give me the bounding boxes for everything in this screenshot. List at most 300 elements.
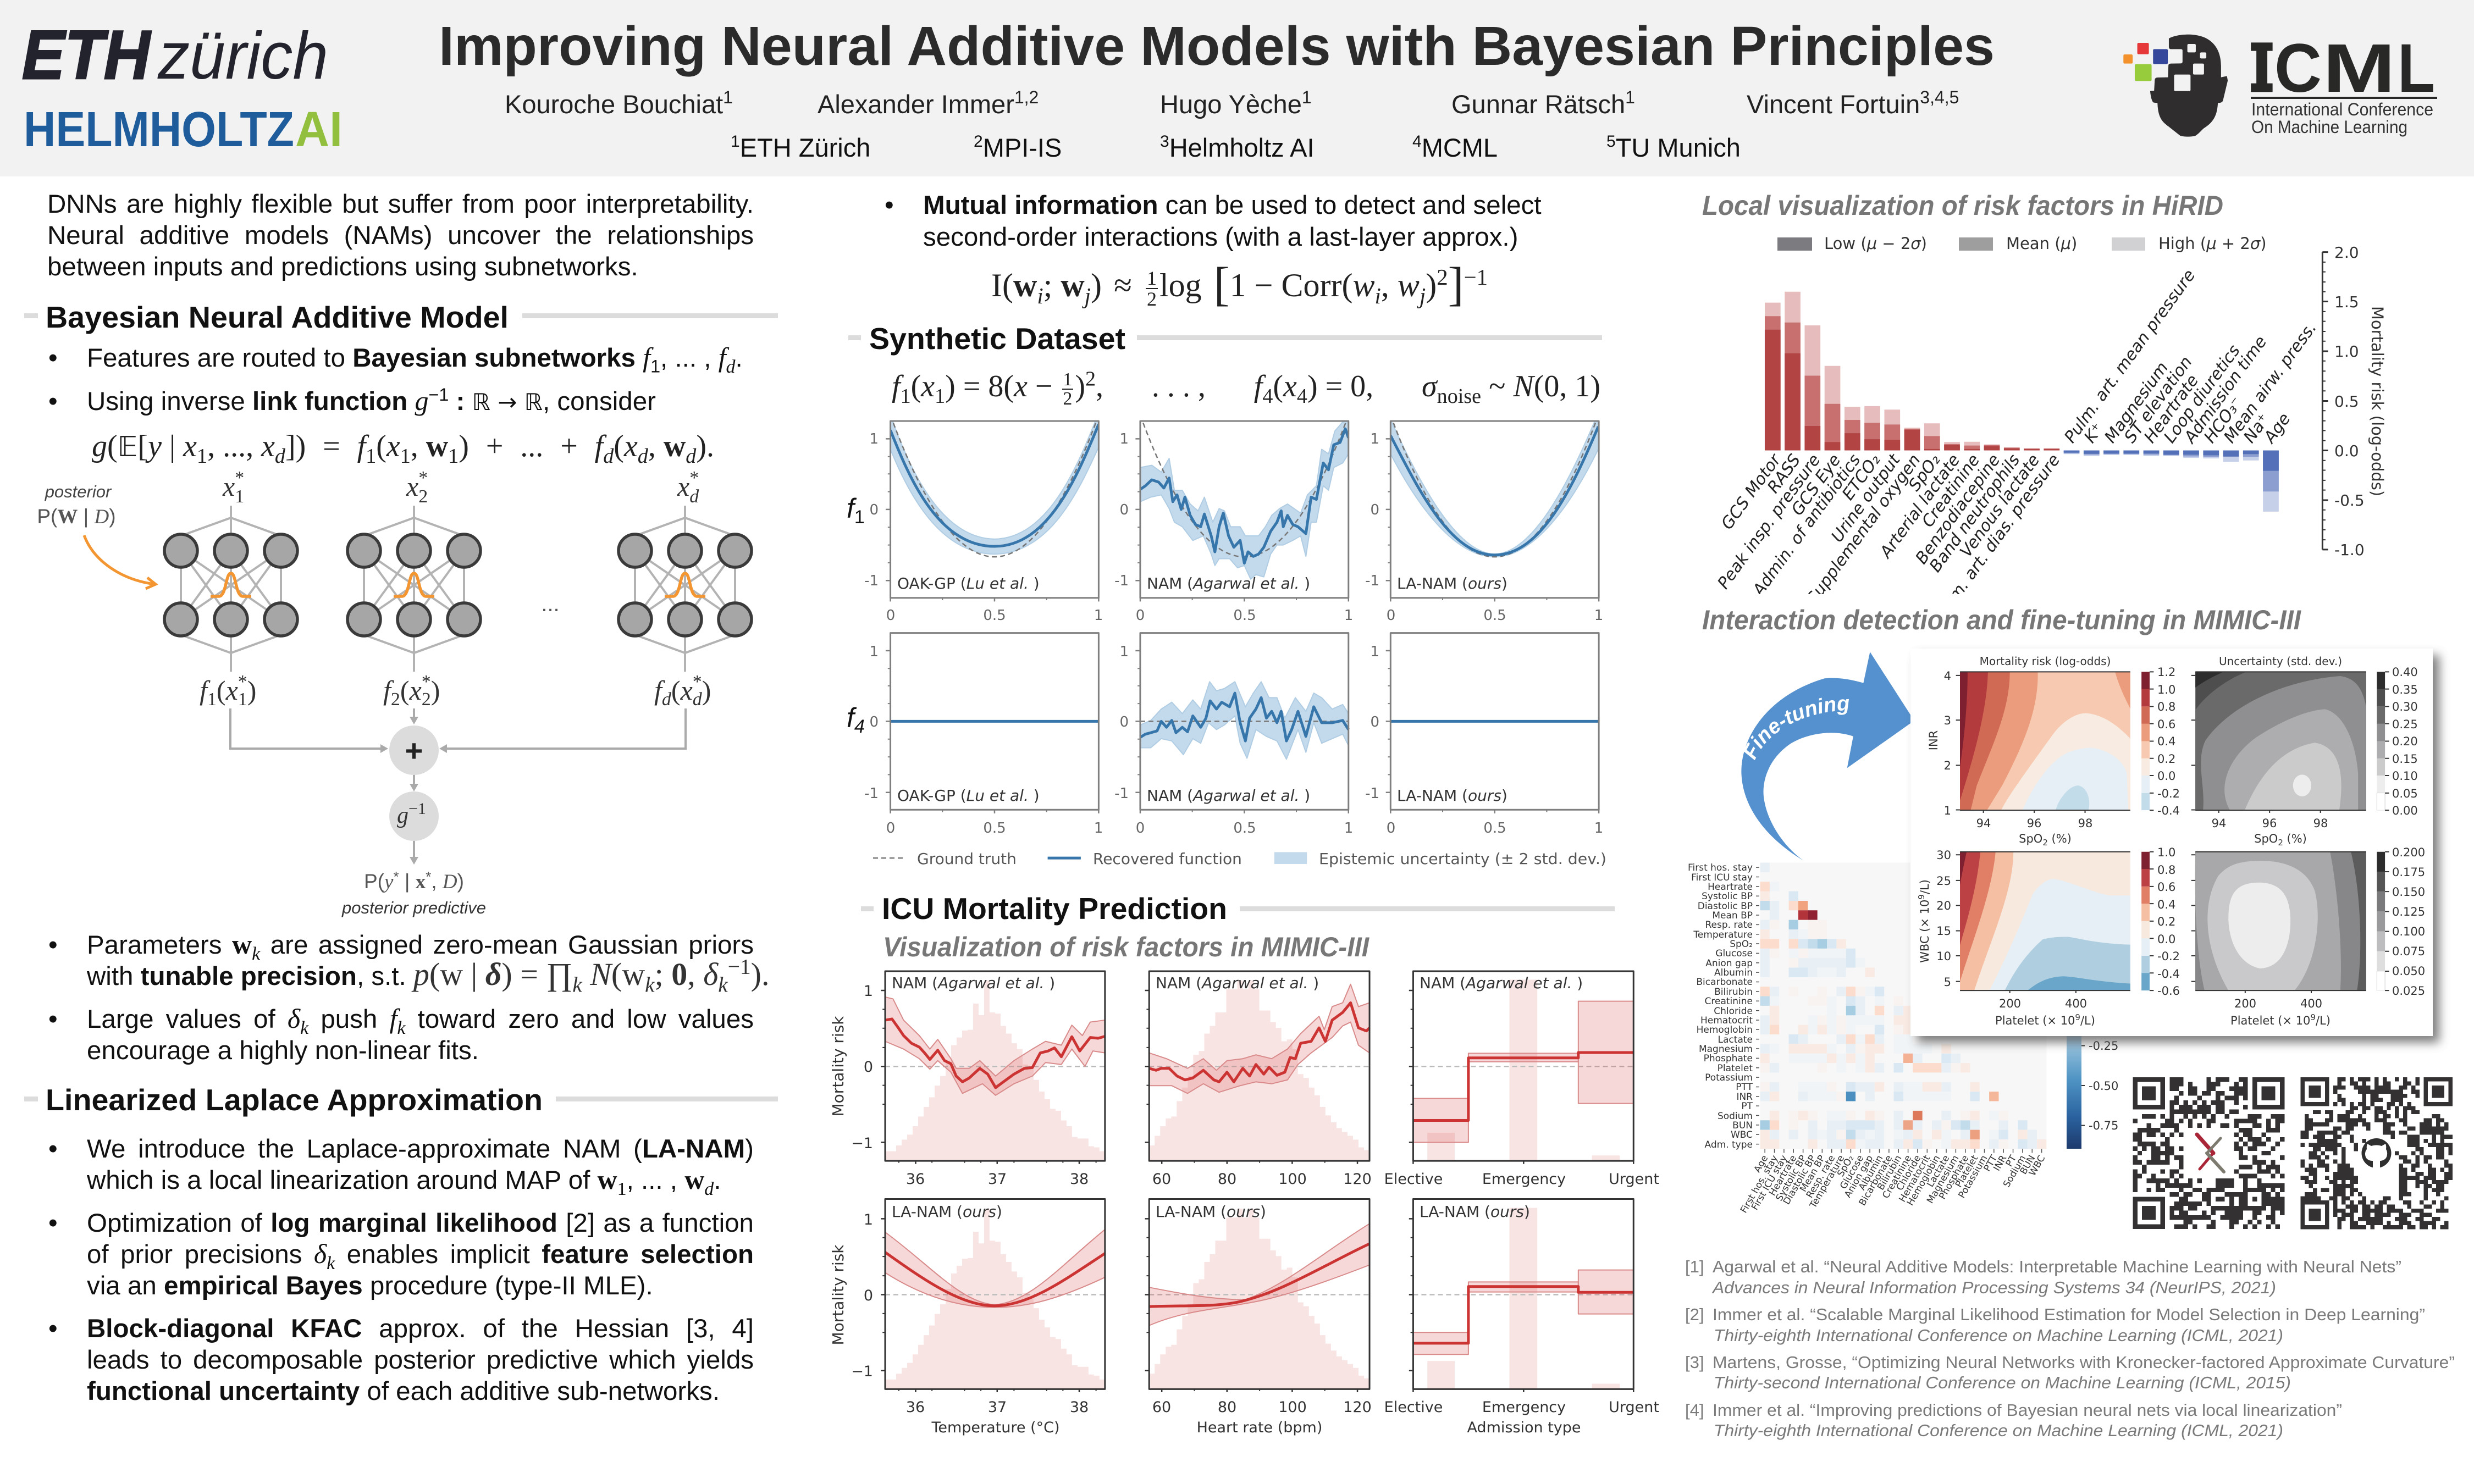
- bullet: marginal likelihood: of prior precisions δk enables implicit feature selection: [87, 1238, 754, 1273]
- histograms: [885, 979, 1620, 1389]
- legend: High (μ + 2σ): [2158, 234, 2267, 253]
- negative feature labels: GCS Eye: [1788, 451, 1845, 519]
- heatmap row labels: Lactate: [1718, 1034, 1753, 1045]
- ICU panel names: NAM (Agarwal et al. ): [892, 974, 1055, 992]
- negative feature labels: ETCO₂: [1838, 451, 1884, 504]
- label: posterior predictive: |: [399, 870, 416, 893]
- equation: additive model: = + ... +: [323, 429, 578, 463]
- heatmap column labels: PTT: [1982, 1153, 2000, 1173]
- affiliations: 2: [974, 132, 983, 151]
- ICU x labels: 37: [988, 1399, 1007, 1416]
- ICU x labels: Elective: [1384, 1399, 1443, 1416]
- heatmap column labels: Platelet: [1953, 1153, 1980, 1189]
- label: posterior: posterior: [45, 482, 112, 501]
- contour tick labels: 1: [1944, 804, 1951, 817]
- authors: Hugo Yèche: [1160, 90, 1302, 119]
- heatmap column labels: PT: [2004, 1153, 2019, 1169]
- bullet: priors: with tunable precision, s.t. p(w | δ) = ∏k N(wk; 0, δk−1).: [87, 955, 769, 997]
- chart: HiRID risk factors: [1714, 234, 2387, 625]
- contour tick labels: 25: [1936, 874, 1951, 888]
- equation: mutual information: 2: [1147, 288, 1157, 310]
- contour axis titles: (%): [2048, 832, 2072, 845]
- ICML logo: On Machine Learning: [2251, 117, 2407, 137]
- contour axis titles: /L): [1918, 879, 1931, 894]
- contour tick labels: 0.2: [2157, 752, 2175, 766]
- contour tick labels: 96: [2027, 817, 2041, 830]
- bullet: LA-NAM: which is a local linearization around MAP of w1, ... , wd.: [87, 1164, 721, 1199]
- equation: mutual information: 1: [1147, 267, 1157, 289]
- contour tick labels: 200: [2234, 997, 2256, 1010]
- contour tick labels: 1.0: [2157, 683, 2175, 696]
- bullet: large values: [48, 1003, 754, 1065]
- panel: fine-tuning contour card: [1910, 649, 2439, 1043]
- heatmap colorbar: -0.50: [2089, 1079, 2118, 1093]
- heatmap row labels: First hos. stay: [1688, 862, 1753, 873]
- synthetic tick labels: [864, 431, 1603, 837]
- contour tick labels: 20: [1936, 899, 1951, 912]
- output labels: 1: [238, 689, 247, 710]
- negative feature labels: Venous lactate: [1956, 451, 2044, 561]
- reference 4: Thirty-eighth International Conference on Machine Learning (ICML, 2021): [1714, 1421, 2283, 1440]
- equation: additive model: g(𝔼[y | x1, ..., xd]): [92, 429, 306, 468]
- affiliations: 5: [1606, 132, 1616, 151]
- contour tick labels: 0.00: [2392, 804, 2418, 817]
- bullet: mutual information: second-order interactions (with a last-layer approx.): [923, 223, 1518, 252]
- heatmap column labels: Hematocrit: [1897, 1153, 1932, 1204]
- synthetic tick labels: 1: [1094, 607, 1103, 624]
- ICU panel names: LA-NAM (ours): [1420, 1203, 1530, 1221]
- synthetic tick labels: 1: [869, 431, 879, 447]
- negative feature labels: GCS Motor: [1718, 450, 1785, 533]
- ICU x labels: Heart rate (bpm): [1197, 1419, 1322, 1436]
- contour tick labels: 1.2: [2157, 666, 2175, 679]
- heatmap row labels: Sodium: [1718, 1111, 1753, 1122]
- row label f4: 4: [854, 716, 865, 737]
- equation: synthetic functions: σnoise ~ N(0, 1): [1422, 369, 1600, 408]
- authors: [505, 87, 1959, 119]
- contour tick labels: 0.6: [2157, 881, 2175, 894]
- ICU x labels: Temperature (°C): [931, 1419, 1060, 1436]
- heatmap row labels: Mean BP: [1712, 910, 1753, 921]
- ICU x labels: 38: [1070, 1171, 1089, 1188]
- output labels: ): [431, 675, 440, 706]
- axis tick labels: -1.0: [2334, 541, 2365, 559]
- axis tick labels: 1.0: [2334, 342, 2359, 361]
- heatmap row labels: Heartrate: [1708, 882, 1753, 893]
- contour axis titles: 9: [2075, 1012, 2080, 1022]
- ETH Zurich logo: zürich: [157, 18, 328, 93]
- positive feature labels: K⁺: [2080, 419, 2107, 447]
- contour tick labels: 4: [1944, 669, 1951, 683]
- heatmap row labels: Chloride: [1714, 1006, 1753, 1017]
- contour tick labels: 1.0: [2157, 846, 2175, 859]
- heatmap row labels: Hemoglobin: [1697, 1025, 1753, 1036]
- axis tick labels: [2334, 243, 2365, 559]
- panel: f4 OAK-GP: [891, 720, 1098, 723]
- contour tick labels: 0.8: [2157, 700, 2175, 713]
- output labels: [200, 672, 711, 710]
- text: •: [48, 1314, 58, 1343]
- ICU y axis titles: Mortality risk: [829, 1016, 847, 1117]
- row label f4: f: [847, 702, 854, 733]
- heatmap row labels: Albumin: [1714, 967, 1753, 978]
- output labels: 2: [391, 689, 400, 710]
- text: •: [48, 1209, 58, 1238]
- synthetic tick labels: -1: [864, 573, 879, 589]
- heatmap column labels: Glucose: [1838, 1153, 1866, 1191]
- label: posterior: P(W | D): [37, 505, 116, 528]
- synthetic tick labels: 0.5: [1483, 820, 1506, 837]
- authors: 1,2: [1014, 87, 1039, 107]
- ICU x labels: 60: [1152, 1399, 1171, 1416]
- arrow: posterior to weights: [84, 535, 156, 589]
- reference 2: [2]: [1685, 1305, 1704, 1324]
- ICU panel names: LA-NAM (ours): [1156, 1203, 1266, 1221]
- text: •: [885, 191, 894, 220]
- contour tick labels: 0.200: [2392, 846, 2425, 859]
- ICU x labels: 37: [988, 1171, 1007, 1188]
- node: inverse link: −1: [408, 800, 426, 818]
- ICU y axis titles: [829, 1016, 847, 1345]
- output labels: 1: [207, 689, 217, 710]
- contour tick labels: 400: [2300, 997, 2322, 1010]
- ellipsis: ...: [541, 592, 560, 616]
- equation: mutual information: [991, 268, 1488, 301]
- authors: Gunnar Rätsch: [1451, 90, 1625, 119]
- synthetic tick labels: 0: [886, 607, 895, 624]
- synthetic tick labels: 0: [886, 820, 895, 837]
- affiliations: MPI-IS: [983, 133, 1062, 162]
- label: posterior predictive: D): [443, 870, 464, 893]
- affiliations: 4: [1412, 132, 1422, 151]
- bullet: marginal likelihood: via an empirical Bayes procedure (type-II MLE).: [87, 1271, 653, 1300]
- title: Improving Neural Additive Models with Bayesian Principles: [439, 15, 1995, 77]
- heatmap row labels: Creatinine: [1705, 996, 1753, 1007]
- input labels: 1: [235, 486, 244, 507]
- heatmap row labels: [1688, 862, 1753, 1150]
- equation: synthetic functions: 1: [1063, 369, 1072, 390]
- ETH Zurich logo: [22, 17, 328, 93]
- heading: Bayesian Neural Additive Model: [24, 300, 778, 334]
- bullet: marginal likelihood: Optimization of log marginal likelihood [2] as a function: [87, 1209, 754, 1238]
- contour axis titles: WBC (× 10: [1918, 900, 1931, 963]
- reference 2: [1685, 1305, 2425, 1345]
- ICU panel names: LA-NAM (ours): [892, 1203, 1002, 1221]
- synthetic panel names: LA-NAM (ours): [1397, 787, 1507, 805]
- affiliations: [731, 132, 1741, 162]
- negative feature labels: Arterial lactate: [1876, 451, 1964, 562]
- equation: mutual information: [1 − Corr(wi, wj)2]−1: [1214, 257, 1488, 311]
- bullet: KFAC: [48, 1314, 754, 1406]
- synthetic tick labels: -1: [1114, 785, 1129, 802]
- input labels: x: [406, 471, 418, 502]
- input labels: [222, 468, 699, 507]
- ETH Zurich logo: ETH: [22, 17, 152, 93]
- heatmap column labels: Age: [1752, 1153, 1770, 1175]
- synthetic tick labels: 1: [1370, 644, 1379, 660]
- heatmap row labels: Diastolic BP: [1698, 901, 1753, 912]
- positive feature labels: Loop diuretics: [2160, 341, 2244, 447]
- chart: interaction heatmap: [1688, 862, 2118, 1215]
- network 3: [618, 506, 752, 672]
- contour tick labels: 3: [1944, 714, 1951, 727]
- input labels: x: [677, 471, 689, 502]
- synthetic tick labels: 0: [1387, 607, 1395, 624]
- affiliations: MCML: [1422, 133, 1498, 162]
- heatmap column labels: SpO₂: [1835, 1153, 1856, 1179]
- Helmholtz AI logo: AI: [295, 102, 343, 157]
- synthetic panel names: [897, 574, 1507, 805]
- output labels: f: [654, 675, 665, 706]
- heatmap column labels: Phosphate: [1937, 1153, 1971, 1201]
- axis tick labels: 2.0: [2334, 243, 2359, 262]
- bullet: priors: Parameters wk are assigned zero-mean Gaussian priors: [87, 929, 754, 964]
- references: [1685, 1257, 2455, 1440]
- reference 2: Thirty-eighth International Conference on Machine Learning (ICML, 2021): [1714, 1326, 2283, 1345]
- contour tick labels: 96: [2262, 817, 2277, 830]
- legend text: [917, 850, 1606, 868]
- chart: ICU mortality grid: [829, 971, 1659, 1436]
- axis tick labels: 1.5: [2334, 293, 2359, 311]
- ICU y labels: 0: [864, 1059, 873, 1076]
- contour tick labels: [1936, 666, 2425, 1010]
- text: introduction: [47, 190, 754, 281]
- synthetic tick labels: 1: [1119, 431, 1129, 447]
- synthetic tick labels: 0: [1387, 820, 1395, 837]
- equation: mutual information: I(wi; wj): [991, 267, 1102, 308]
- label: posterior predictive: P(y: [364, 870, 393, 893]
- legend: Low (μ − 2σ): [1824, 234, 1927, 253]
- contour tick labels: 0.2: [2157, 915, 2175, 928]
- output labels: *: [422, 672, 431, 692]
- ICU x labels: Emergency: [1482, 1399, 1566, 1416]
- diagram: Bayesian additive network: [37, 468, 752, 917]
- node: inverse link: [389, 791, 439, 841]
- output labels: (: [217, 675, 226, 706]
- subheading: HiRID risk factors: Local visualization of risk factors in HiRID: [1702, 190, 2223, 221]
- equation: additive model: fd(xd, wd).: [595, 429, 714, 468]
- affiliations: 1: [731, 132, 740, 151]
- text: •: [48, 1005, 58, 1034]
- risk means: [885, 1003, 1633, 1343]
- row label f1: 1: [854, 507, 865, 528]
- negative feature labels: Pulm. art. dias. pressure: [1930, 451, 2064, 625]
- authors: Kouroche Bouchiat: [505, 90, 723, 119]
- heatmap column labels: WBC: [2027, 1153, 2047, 1178]
- synthetic panel names: LA-NAM (ours): [1397, 574, 1507, 593]
- bullet: KFAC: leads to decomposable posterior predictive which yields: [87, 1345, 754, 1375]
- negative feature labels: Urine output: [1827, 450, 1904, 546]
- ICU panel names: NAM (Agarwal et al. ): [1156, 974, 1319, 992]
- reference 3: [1685, 1353, 2455, 1392]
- panel: f1 LA-NAM: [1390, 413, 1598, 557]
- row label f1: f: [847, 493, 854, 524]
- synthetic tick labels: 0.5: [983, 820, 1006, 837]
- contour tick labels: -0.2: [2157, 950, 2180, 963]
- legend: Mean (μ): [2006, 234, 2077, 253]
- heatmap column labels: Creatinine: [1880, 1153, 1914, 1200]
- ICU y labels: −1: [851, 1135, 873, 1152]
- bullet: KFAC: functional uncertainty of each additive sub-networks.: [87, 1377, 720, 1406]
- contour axis titles: SpO: [2019, 832, 2042, 845]
- heatmap row labels: WBC: [1731, 1129, 1753, 1140]
- bullet: large values: Large values of δk push fk toward zero and low values: [87, 1003, 754, 1038]
- bullet: LA-NAM: We introduce the Laplace-approximate NAM (LA-NAM): [87, 1134, 754, 1164]
- synthetic tick labels: -1: [1114, 573, 1129, 589]
- positive feature labels: [2061, 266, 2321, 447]
- input labels: *: [689, 468, 699, 488]
- bullet: priors: [48, 929, 769, 997]
- contour tick labels: 0.125: [2392, 905, 2425, 918]
- heatmap row labels: Hematocrit: [1700, 1015, 1753, 1026]
- synthetic tick labels: 0: [1119, 502, 1129, 518]
- output labels: (: [671, 675, 681, 706]
- node: sum: +: [405, 733, 423, 768]
- authors: Vincent Fortuin: [1747, 90, 1920, 119]
- positive feature labels: Heartrate: [2140, 371, 2202, 447]
- synthetic tick labels: 1: [1344, 607, 1353, 624]
- negative feature labels: Supplemental oxygen: [1803, 451, 1924, 608]
- synthetic tick labels: 0.5: [983, 607, 1006, 624]
- zero lines: [885, 1066, 1633, 1295]
- heatmap column labels: Lactate: [1925, 1153, 1952, 1189]
- heatmap row labels: Bicarbonate: [1696, 977, 1753, 988]
- ICML logo: M: [2323, 30, 2395, 107]
- bars: [1765, 252, 2328, 550]
- negative feature labels: Band neutrophils: [1926, 451, 2024, 576]
- contour axis titles: [1917, 730, 2331, 1027]
- authors: 3,4,5: [1920, 87, 1959, 107]
- header band: [0, 0, 2474, 176]
- affiliations: 3: [1160, 132, 1169, 151]
- text: •: [48, 387, 58, 416]
- arrow: fine-tuning: [1741, 652, 1910, 861]
- heatmap column labels: Resp. rate: [1804, 1153, 1837, 1200]
- contour tick labels: 0.40: [2392, 666, 2418, 679]
- synthetic tick labels: 1: [1119, 644, 1129, 660]
- legend: [1777, 234, 2267, 253]
- heading: Linearized Laplace Approximation: [24, 1083, 778, 1117]
- ICU x labels: [906, 1171, 1659, 1436]
- heatmap background: [1760, 863, 2046, 1149]
- ICU panel names: [892, 974, 1583, 1221]
- ICU x labels: Emergency: [1482, 1171, 1566, 1188]
- output labels: ): [702, 675, 711, 706]
- contour tick labels: -0.4: [2157, 804, 2180, 817]
- negative feature labels: Peak insp. pressure: [1714, 451, 1824, 593]
- equation: additive model: [92, 429, 714, 468]
- ICU x labels: 38: [1070, 1399, 1089, 1416]
- heatmap column labels: Magnesium: [1925, 1153, 1961, 1205]
- contour titles: Mortality risk (log-odds): [1980, 655, 2111, 668]
- affiliations: ETH Zürich: [740, 133, 870, 162]
- ICU y labels: 0: [864, 1287, 873, 1304]
- ICU x labels: 36: [906, 1171, 925, 1188]
- contour axis titles: Platelet (× 10: [2230, 1014, 2310, 1027]
- icon: GitHub logo: [2362, 1138, 2392, 1168]
- contour tick labels: 94: [1976, 817, 1991, 830]
- heatmap ticks: [1758, 863, 2046, 1151]
- contour tick labels: 0.150: [2392, 885, 2425, 899]
- ICU x labels: Elective: [1384, 1171, 1443, 1188]
- equation: mutual information: log: [1159, 267, 1202, 303]
- negative feature labels: Creatinine: [1918, 451, 1984, 531]
- negative feature labels: [1718, 453, 2059, 594]
- output labels: *: [238, 672, 247, 692]
- text: •: [48, 344, 58, 373]
- contour tick labels: 94: [2212, 817, 2226, 830]
- positive feature labels: Magnesium: [2101, 358, 2172, 447]
- positive feature labels: HCO₃⁻: [2200, 393, 2246, 447]
- ICML logo: C: [2274, 30, 2322, 107]
- affiliations: Helmholtz AI: [1169, 133, 1315, 162]
- contour tick labels: 0.4: [2157, 898, 2175, 911]
- axes frames: [886, 421, 1599, 813]
- heatmap row labels: Glucose: [1715, 948, 1753, 959]
- heatmap row labels: Systolic BP: [1702, 891, 1753, 902]
- heatmap cells: [1760, 867, 2046, 1144]
- reference 4: [1685, 1400, 2342, 1440]
- heatmap row labels: INR: [1736, 1092, 1753, 1103]
- contour tick labels: 15: [1936, 924, 1951, 938]
- contour axis titles: 2: [2042, 838, 2048, 848]
- ICU y labels: [851, 983, 873, 1380]
- heatmap row labels: Anion gap: [1705, 958, 1753, 969]
- equation: synthetic functions: [892, 370, 1600, 403]
- contour tick labels: 98: [2313, 817, 2328, 830]
- heatmap row labels: Magnesium: [1699, 1044, 1753, 1055]
- output labels: f: [200, 675, 211, 706]
- heatmap column labels: INR: [1991, 1153, 2009, 1173]
- heatmap column labels: Bilirubin: [1875, 1153, 1904, 1192]
- bullet: large values: encourage a highly non-linear fits.: [87, 1036, 479, 1065]
- legend text: Epistemic uncertainty (± 2 std. dev.): [1319, 850, 1606, 868]
- heatmap column labels: Albumin: [1857, 1153, 1885, 1192]
- heatmap row labels: SpO₂: [1730, 939, 1753, 950]
- input labels: *: [235, 468, 244, 488]
- synthetic tick labels: 0: [1119, 714, 1129, 730]
- label: posterior predictive: [341, 868, 486, 917]
- contour: uncertainty SpO2 vs INR: [2195, 672, 2366, 810]
- panel: f1 NAM: [1140, 415, 1349, 579]
- positive feature labels: ST elevation: [2120, 353, 2196, 447]
- contour tick labels: 30: [1936, 849, 1951, 862]
- input labels: x: [222, 471, 235, 502]
- authors: Alexander Immer: [818, 90, 1014, 119]
- heatmap row labels: Potassium: [1705, 1072, 1753, 1083]
- output labels: 2: [422, 689, 431, 710]
- ICU x labels: 120: [1343, 1399, 1372, 1416]
- ICU x labels: 80: [1218, 1171, 1236, 1188]
- heatmap row labels: Resp. rate: [1705, 920, 1753, 931]
- heatmap column labels: Mean BP: [1798, 1153, 1827, 1194]
- contour tick labels: 10: [1936, 950, 1951, 963]
- contour axis titles: INR: [1927, 730, 1940, 750]
- label: posterior: [37, 482, 116, 528]
- legend symbols: [873, 852, 1307, 864]
- right axis: [2322, 252, 2328, 550]
- text: introduction: between inputs and predictions using subnetworks.: [47, 252, 638, 281]
- contour axis titles: 2: [2278, 838, 2283, 848]
- positive feature labels: Age: [2260, 409, 2295, 447]
- contour tick labels: -0.4: [2157, 967, 2180, 981]
- output labels: x: [409, 675, 422, 706]
- contour axis titles: Platelet (× 10: [1995, 1014, 2075, 1027]
- heatmap column labels: Temperature: [1808, 1153, 1847, 1211]
- synthetic tick labels: 1: [1594, 607, 1603, 624]
- authors: 1: [723, 87, 733, 107]
- ICML logo: International Conference: [2251, 99, 2433, 119]
